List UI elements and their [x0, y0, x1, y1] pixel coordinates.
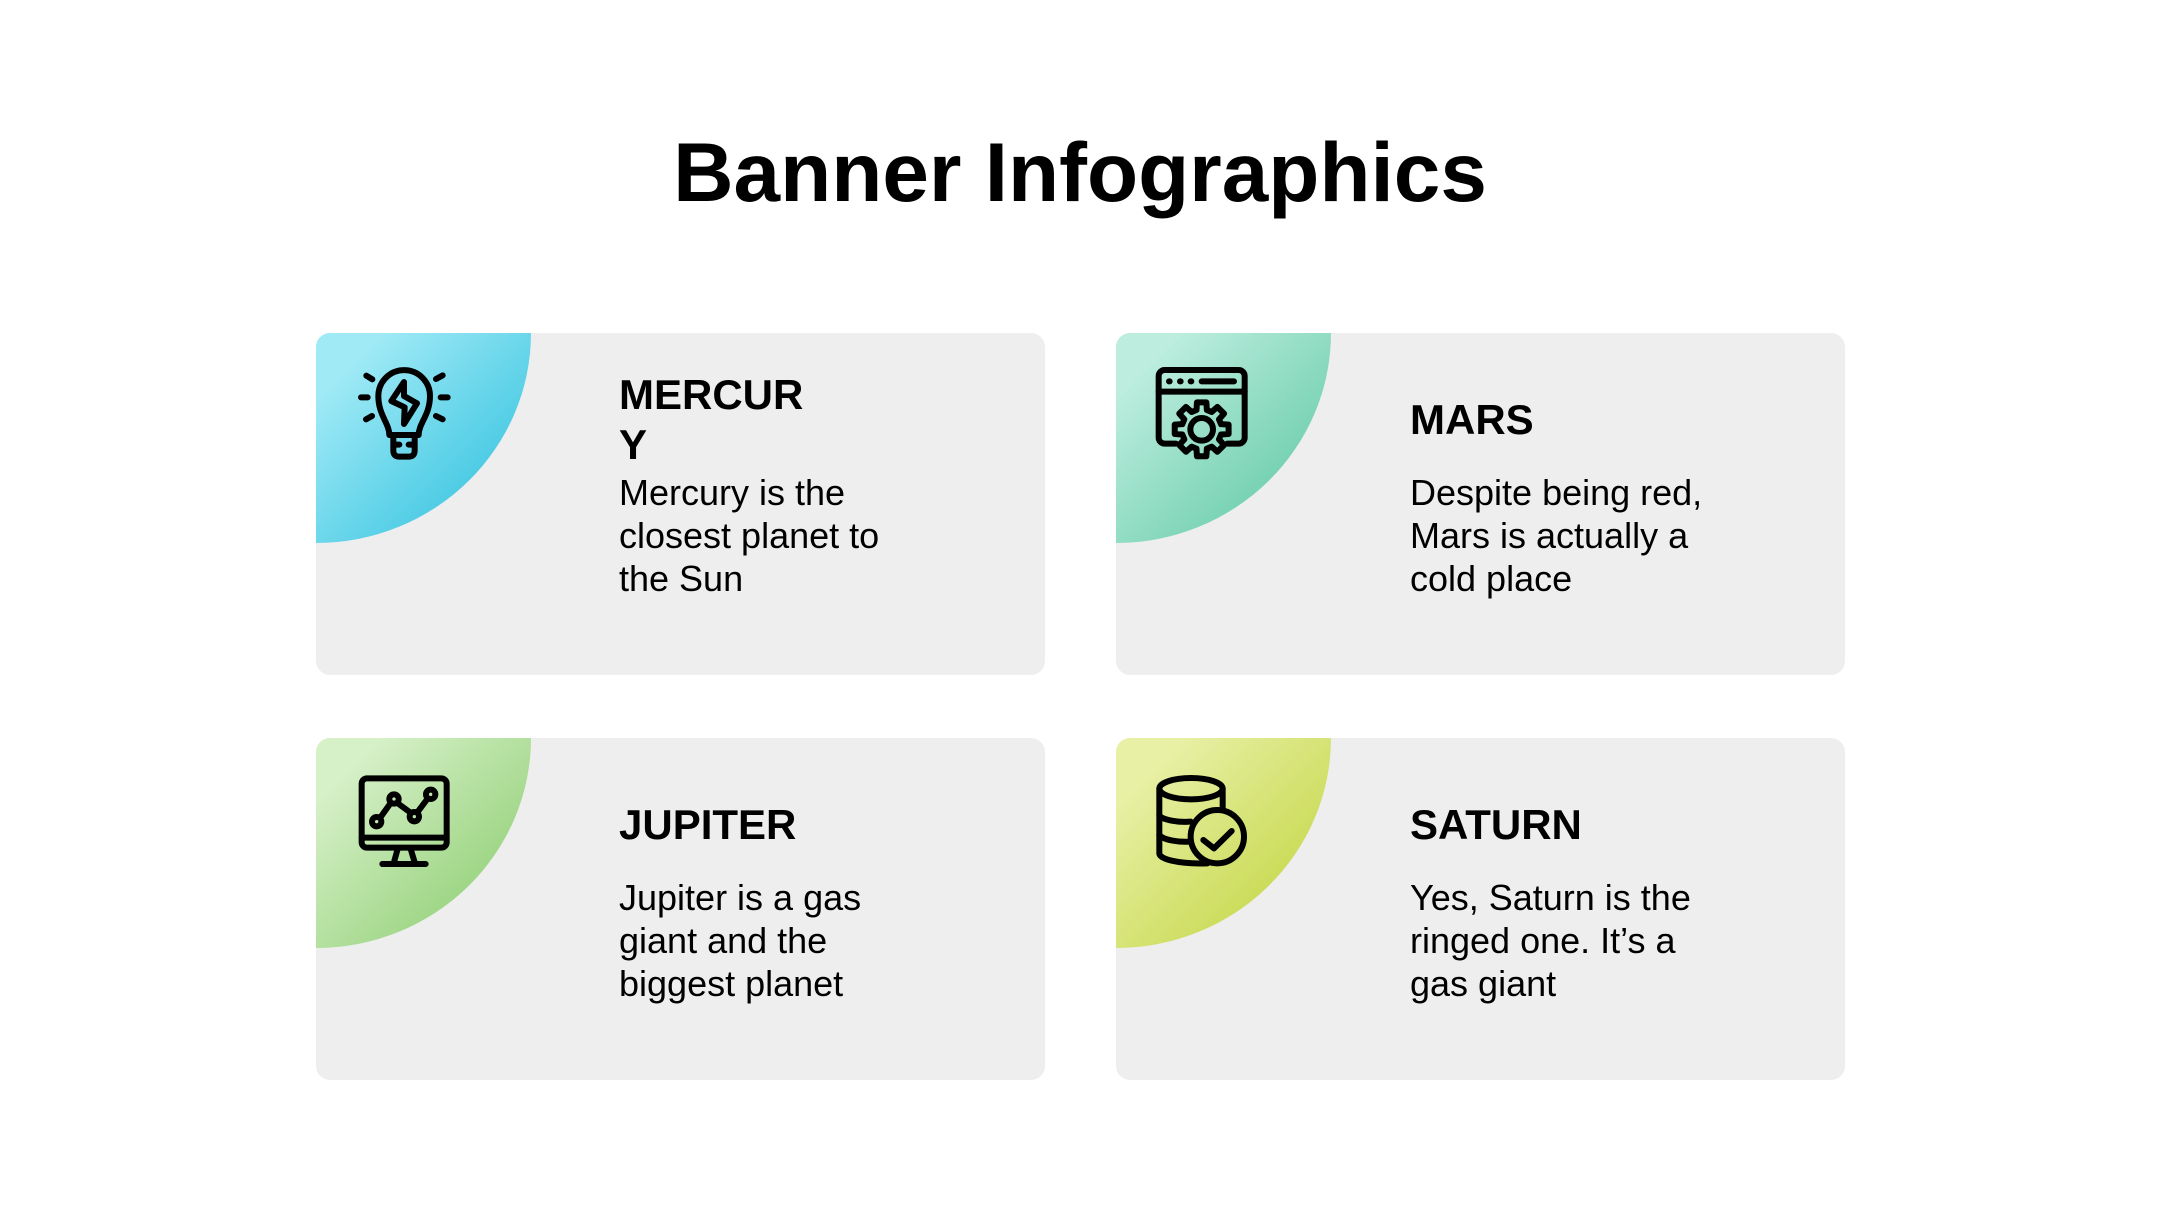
text: Jupiter description	[619, 877, 861, 1004]
heading: Saturn: SATURN	[1410, 801, 1582, 848]
text: Mars description	[1410, 472, 1702, 599]
icon: browser window with gear	[1156, 367, 1248, 460]
text: Saturn description: Yes, Saturn is the	[1410, 877, 1691, 918]
quarter circle: yellow-green	[1116, 738, 1331, 948]
heading: Mars: MARS	[1410, 396, 1534, 443]
text: Mercury description: the Sun	[619, 558, 743, 599]
heading: Mercury: MERCUR	[619, 371, 803, 418]
panel: Mars	[1116, 333, 1845, 675]
quarter circle: blue	[316, 333, 531, 543]
text: Mars description: Mars is actually a	[1410, 515, 1688, 556]
text: Mercury description: closest planet to	[619, 515, 879, 556]
text: Jupiter description: biggest planet	[619, 963, 843, 1004]
icon: database with check mark	[1156, 775, 1247, 866]
text: Mars description: Despite being red,	[1410, 472, 1702, 513]
icon: light bulb	[358, 367, 451, 460]
text: Mars description: cold place	[1410, 558, 1572, 599]
text: Jupiter description: giant and the	[619, 920, 827, 961]
text: Saturn description: gas giant	[1410, 963, 1556, 1004]
text: Saturn description: ringed one. It’s a	[1410, 920, 1676, 961]
text: Jupiter description: Jupiter is a gas	[619, 877, 861, 918]
quarter circle: teal	[1116, 333, 1331, 543]
panel: Mercury	[316, 333, 1045, 675]
text: Saturn description	[1410, 877, 1691, 1004]
heading: Jupiter: JUPITER	[619, 801, 796, 848]
text: Mercury description: Mercury is the	[619, 472, 845, 513]
text: Mercury description	[619, 472, 879, 599]
icon: monitor with line chart	[358, 775, 450, 867]
heading: Mercury	[619, 371, 803, 468]
quarter circle: green	[316, 738, 531, 948]
panel: Saturn	[1116, 738, 1845, 1080]
title: Banner Infographics	[673, 125, 1487, 219]
heading: Mercury: Y	[619, 421, 647, 468]
panel: Jupiter	[316, 738, 1045, 1080]
